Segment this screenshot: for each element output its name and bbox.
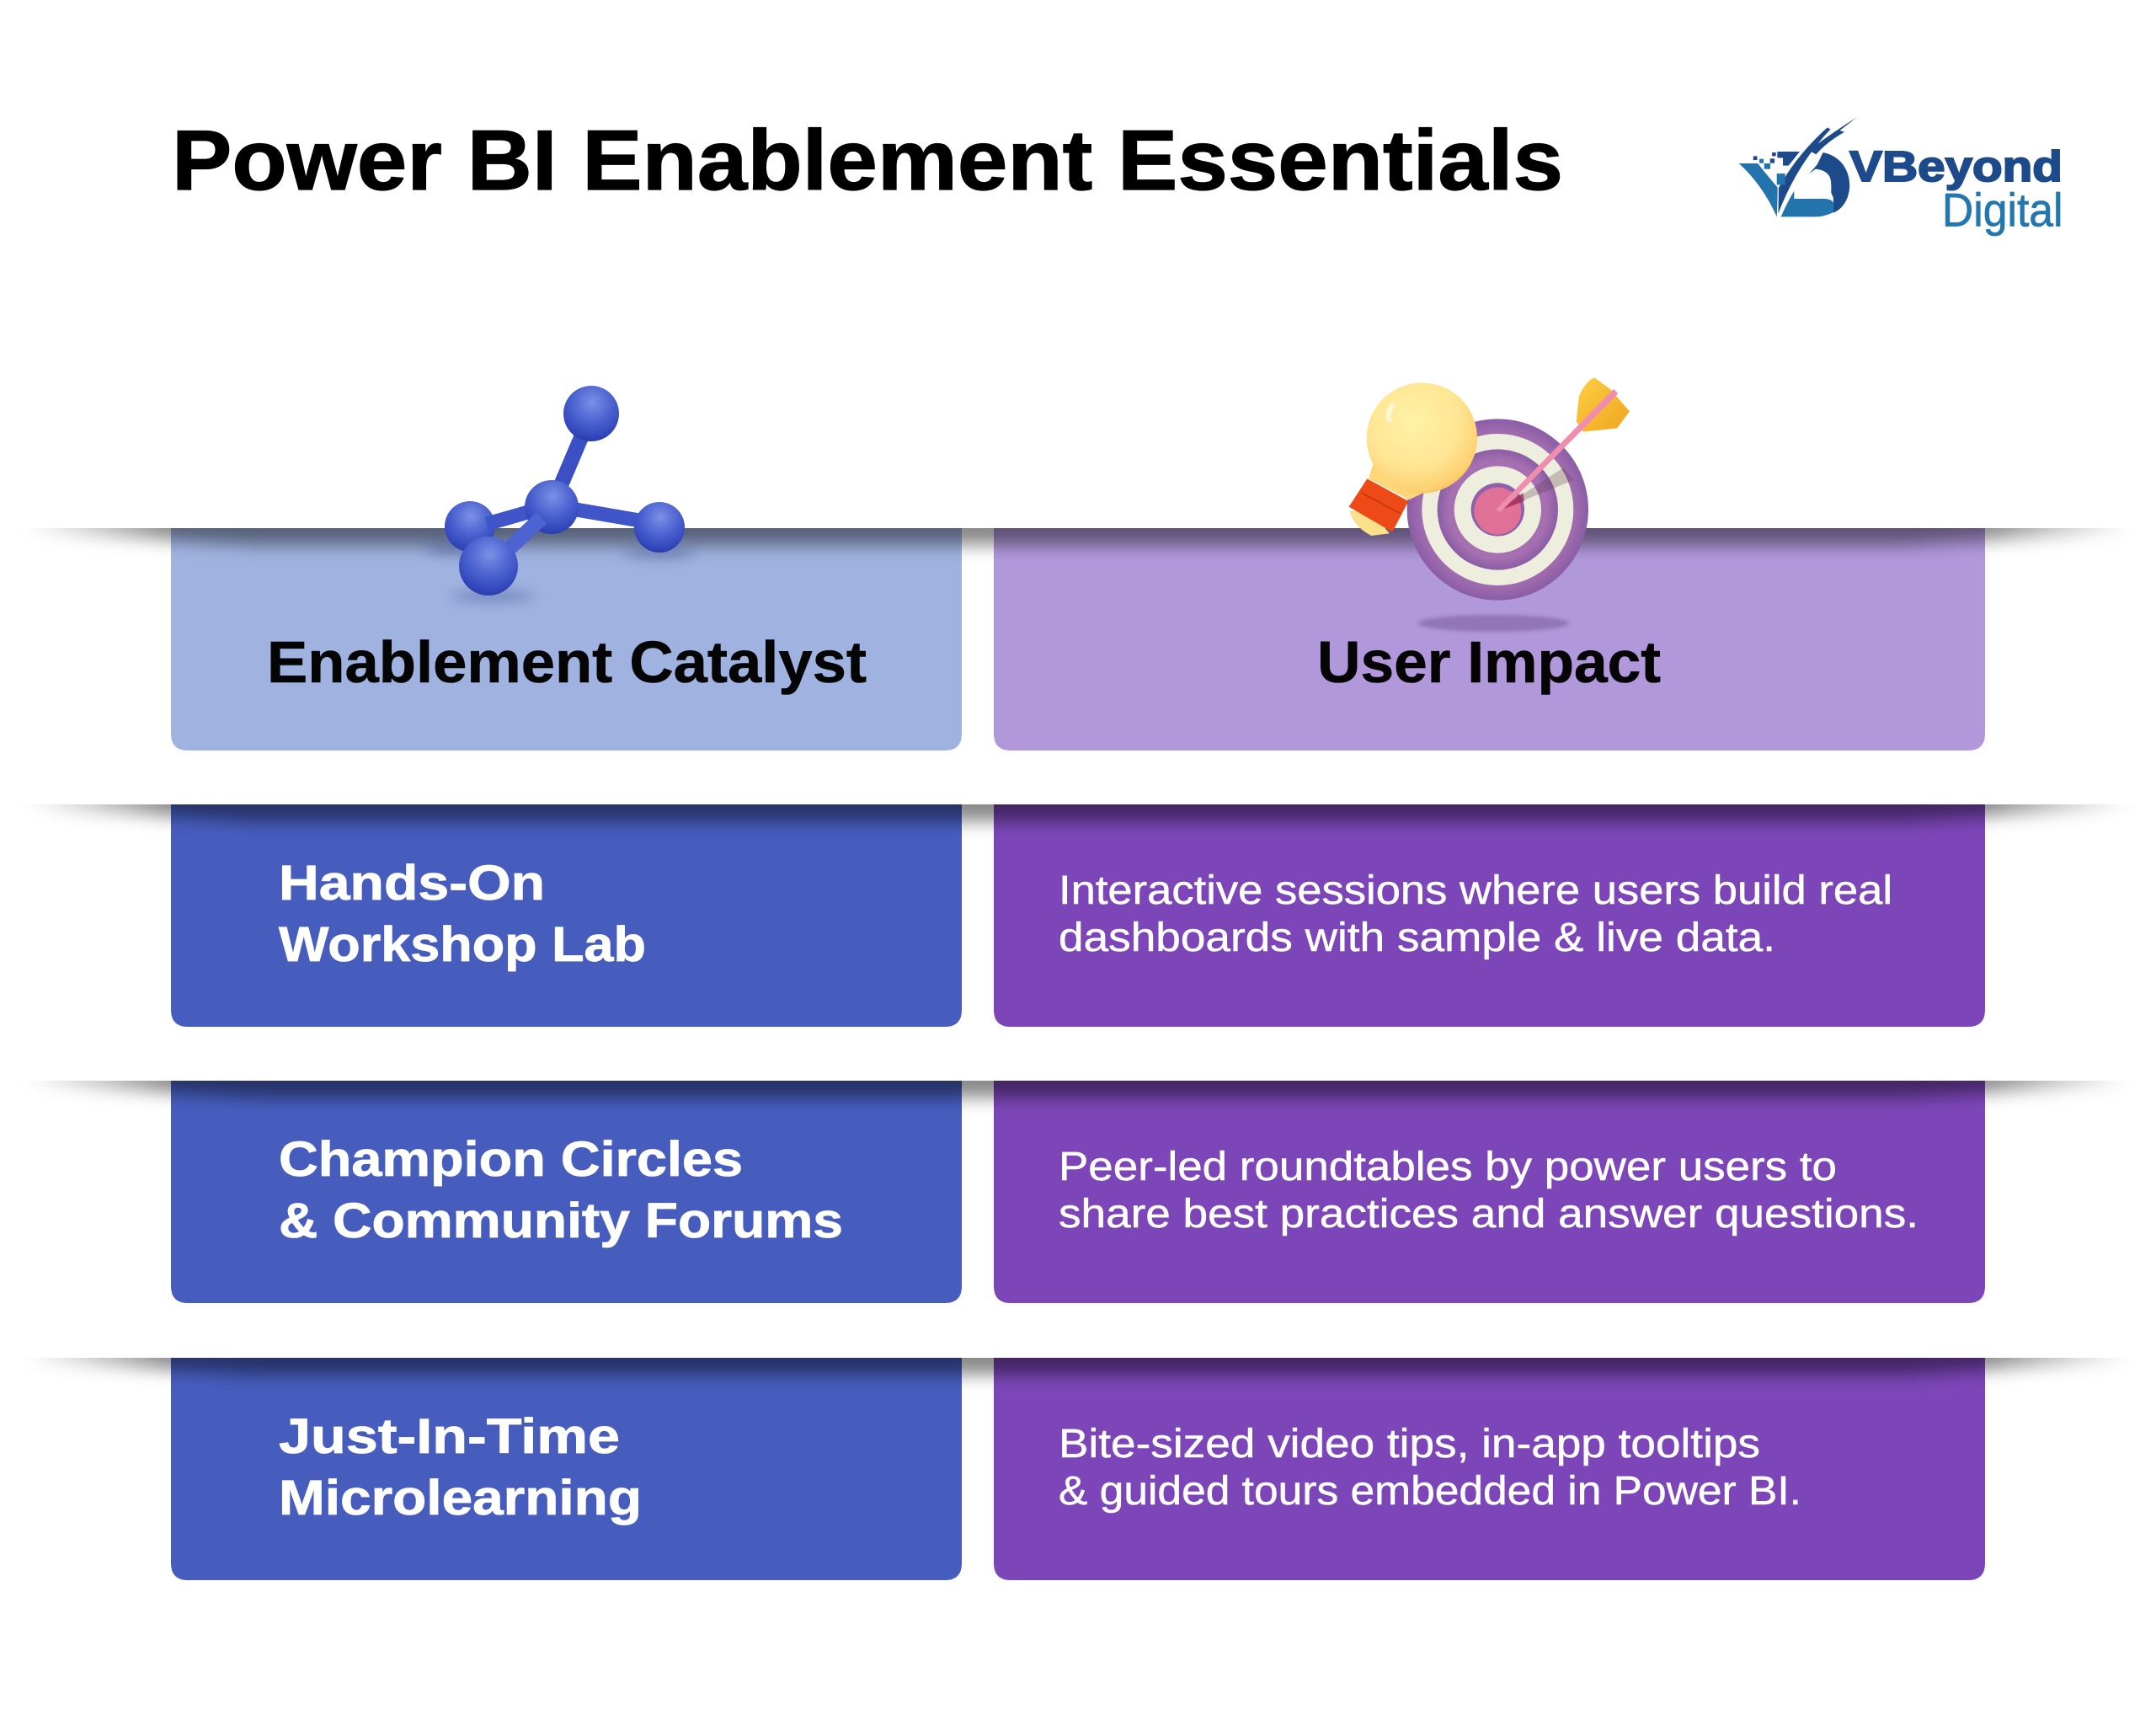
heading: Enablement Catalyst: Enablement Catalyst <box>267 629 867 695</box>
row 1 catalyst label: Hands-On <box>279 856 545 911</box>
logo wordmark VBeyond: VBeyond <box>1849 142 2063 190</box>
row 2 impact text: share best practices and answer questions. <box>1059 1192 1919 1237</box>
row 1 catalyst label: Workshop Lab <box>279 917 646 972</box>
row 3: impact description <box>994 1358 1985 1580</box>
heading: User Impact: User Impact <box>1317 629 1661 695</box>
icon: molecule <box>425 386 695 602</box>
title: Power BI Enablement Essentials <box>172 114 1563 208</box>
row 2 catalyst label: Champion Circles <box>279 1132 743 1187</box>
arrow <box>1497 377 1630 511</box>
row 1 impact text: dashboards with sample & live data. <box>1059 916 1775 960</box>
logo mark <box>1739 117 1856 216</box>
row 3 impact text: & guided tours embedded in Power BI. <box>1059 1469 1801 1514</box>
panel: User Impact header <box>994 528 1985 750</box>
target shadow <box>1417 615 1569 632</box>
row 2: impact description <box>994 1081 1985 1303</box>
row 1 impact text: Interactive sessions where users build real <box>1059 868 1892 913</box>
light bulb <box>1349 382 1477 536</box>
row 1: impact description <box>994 804 1985 1027</box>
logo wordmark Digital: Digital <box>1942 183 2063 236</box>
row 3 impact text: Bite-sized video tips, in-app tooltips <box>1059 1422 1760 1466</box>
row 3 catalyst label: Microlearning <box>279 1471 642 1525</box>
row 2 impact text: Peer-led roundtables by power users to <box>1059 1145 1837 1189</box>
row 1: Hands-On Workshop Lab <box>171 804 962 1027</box>
target <box>1407 419 1588 601</box>
logo: VBeyond Digital <box>1739 117 2063 236</box>
row 2 catalyst label: & Community Forums <box>279 1194 843 1248</box>
icon: light bulb and target with arrow <box>1349 377 1630 632</box>
row 3 catalyst label: Just-In-Time <box>279 1409 620 1464</box>
panel: Enablement Catalyst header <box>171 528 962 750</box>
row 3: Just-In-Time Microlearning <box>171 1358 962 1580</box>
row 2: Champion Circles and Community Forums <box>171 1081 962 1303</box>
